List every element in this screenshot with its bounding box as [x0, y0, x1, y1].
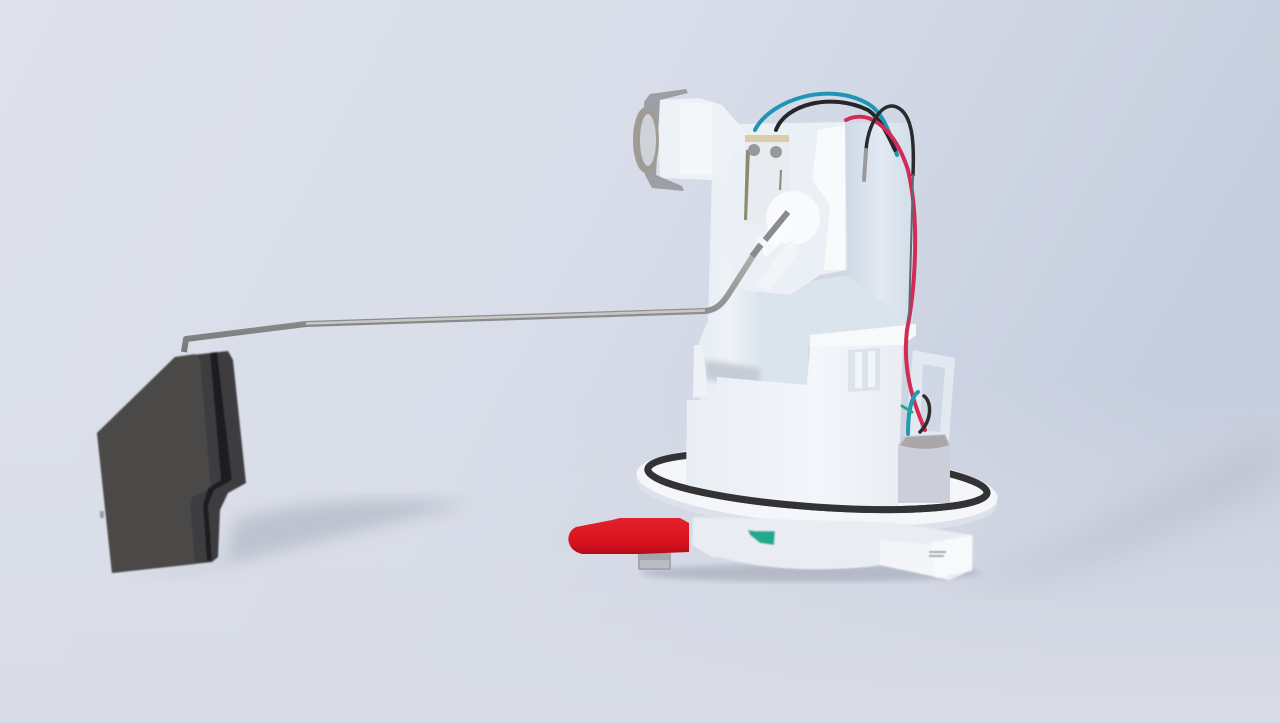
pump cylinder — [705, 123, 913, 386]
float — [97, 351, 246, 573]
vertical column behind bracket — [696, 125, 765, 400]
lower cup — [686, 324, 916, 508]
lower housing and connector — [692, 517, 973, 580]
float arm rod — [184, 212, 788, 352]
sender bracket — [725, 122, 847, 295]
front arc of sealing ring — [646, 469, 987, 519]
flange disc — [633, 435, 1000, 544]
rear wire housing — [898, 350, 955, 503]
red capped tube — [568, 518, 689, 570]
cast shadows — [130, 430, 1280, 585]
wires — [755, 94, 930, 434]
outlet port with clip — [633, 89, 745, 191]
